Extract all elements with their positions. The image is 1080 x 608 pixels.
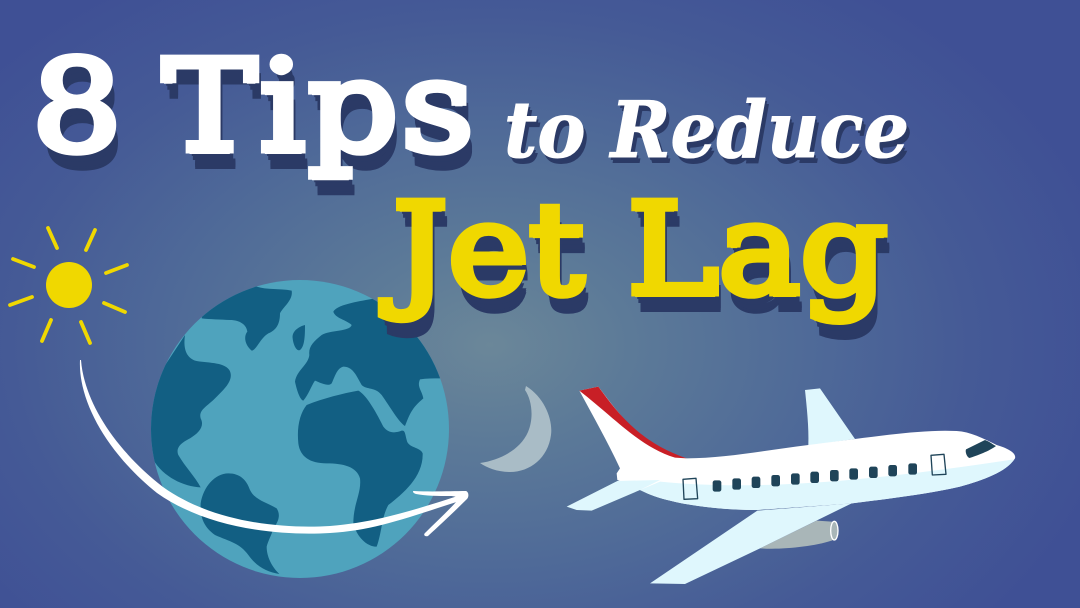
icon: globe	[140, 280, 457, 578]
airplane rear stabilizer	[567, 480, 660, 511]
airplane doors	[683, 454, 946, 499]
airplane tail fin upper	[805, 388, 855, 446]
airplane engine	[760, 521, 837, 549]
airplane windows	[713, 463, 917, 492]
airplane cockpit	[966, 440, 996, 458]
title: 8 Tips: 8 Tips	[32, 32, 477, 180]
airplane main wing	[650, 503, 852, 584]
illustration layer	[8, 226, 1016, 584]
title: Jet Lag: Jet Lag	[393, 176, 888, 322]
icon: airplane	[567, 387, 1015, 584]
title: to Reduce: to Reduce	[504, 85, 909, 176]
airplane tail stripe	[579, 387, 687, 458]
airplane fuselage	[579, 387, 1015, 510]
icon: sun	[10, 228, 127, 343]
airplane belly shading	[640, 459, 1014, 510]
icon: crescent moon	[480, 386, 551, 472]
arrow: path around the globe	[80, 360, 468, 536]
